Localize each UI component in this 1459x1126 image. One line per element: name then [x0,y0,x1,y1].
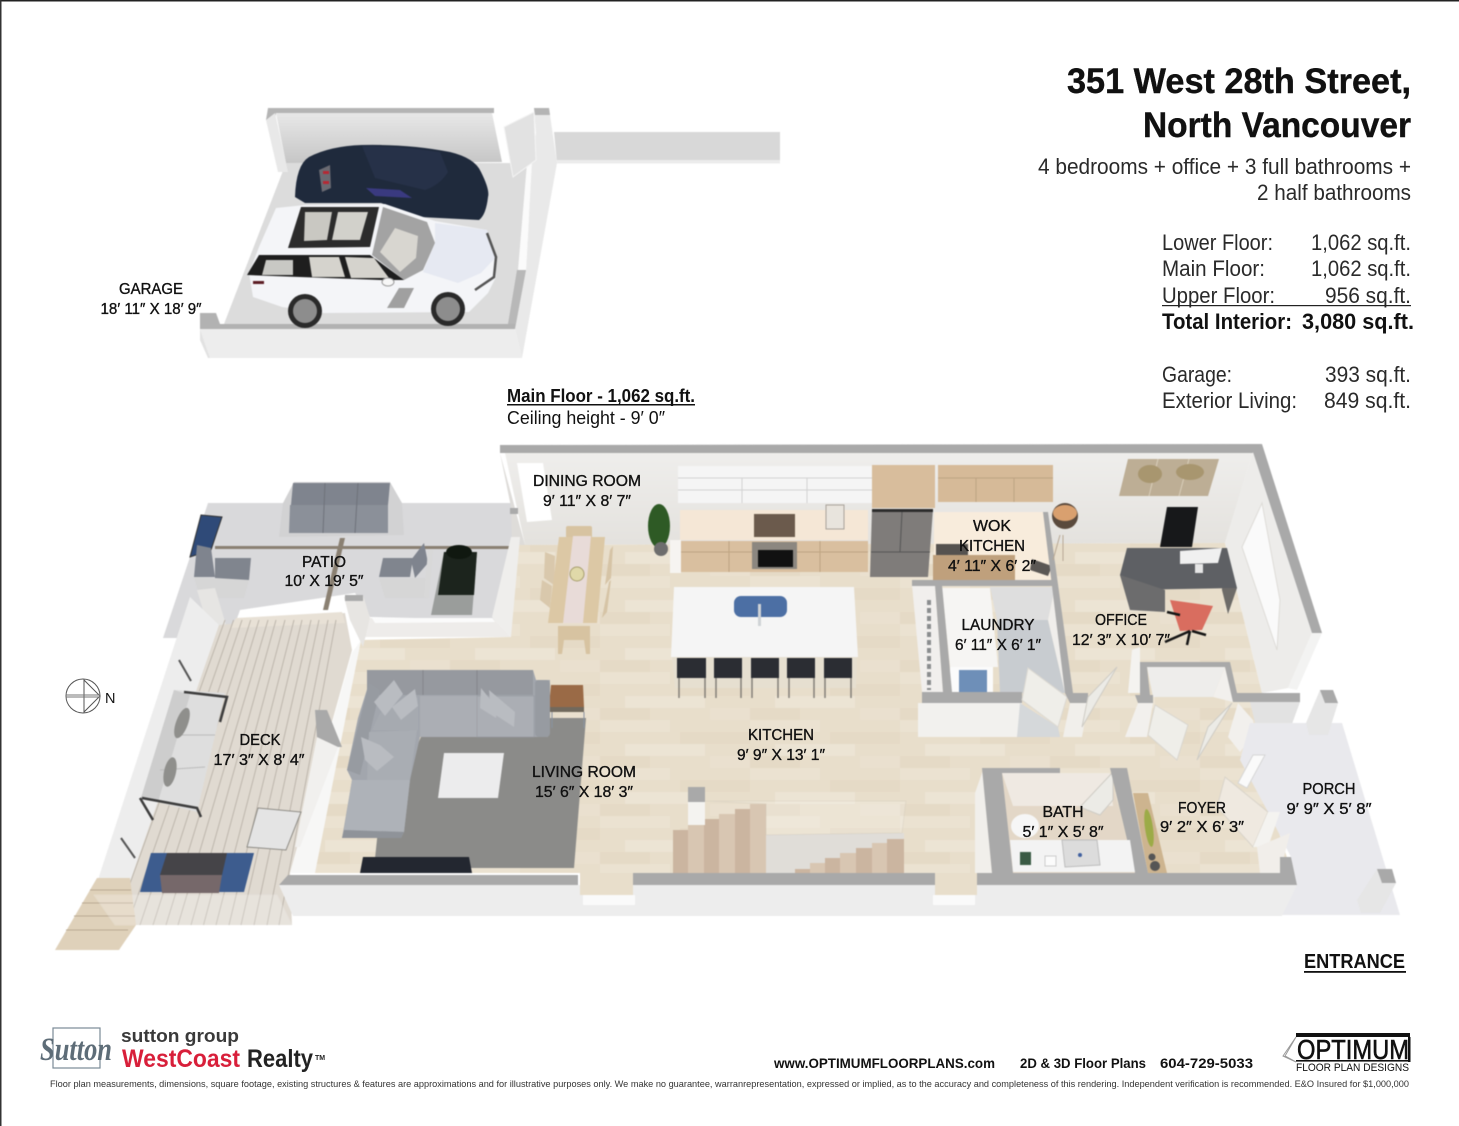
vanity [1010,840,1135,872]
foyer runner [1133,793,1167,873]
contact line [773,1055,1253,1071]
room labels: KITCHEN [748,727,814,744]
title: North Vancouver [1143,106,1411,145]
tall cabinet and fridge [870,465,935,577]
left living wall [290,640,361,873]
logo: Sutton group WestCoast Realty [40,1025,325,1073]
side table [549,685,584,728]
floor heading [507,386,695,428]
area table: 1,062 sq.ft. [1311,230,1411,255]
area table: Exterior Living: [1162,388,1297,413]
contact line: www.OPTIMUMFLOORPLANS.com [773,1055,995,1071]
room labels: WOK [973,518,1011,535]
hood [423,223,496,283]
room labels: DECK [240,732,281,749]
property summary: 4 bedrooms + office + 3 full bathrooms + [1038,154,1411,179]
bathroom [975,768,1148,873]
room labels: 9′ 2″ X 6′ 3″ [1160,819,1244,836]
garage plan [200,108,780,358]
logo: Sutton group WestCoast Realty: TM [315,1055,325,1062]
deck sofa [140,690,227,820]
logo: Optimum Floor Plan Designs: OPTIMUM [1297,1034,1409,1065]
red chair [1165,600,1213,645]
room labels: FOYER [1178,800,1226,817]
deck chair [247,808,301,850]
dark sports car [295,145,488,220]
white SUV [247,204,496,328]
stairs [673,787,906,873]
garage floor [224,163,536,324]
green leaf decor [1142,809,1156,847]
area table: 956 sq.ft. [1325,283,1411,308]
front wall [279,857,1297,916]
closet block [1125,647,1300,760]
room labels: DINING ROOM [533,473,641,490]
bar stools [677,658,852,678]
room labels: LAUNDRY [962,617,1035,634]
glass railing [93,597,219,905]
area table: Upper Floor: [1162,283,1275,308]
laundry door [1022,668,1067,727]
garage walkway [554,132,780,164]
room labels: 15′ 6″ X 18′ 3″ [535,784,633,801]
room labels [214,473,1372,841]
garage right wall [508,108,557,358]
area table: Lower Floor: [1162,230,1273,255]
area table: Total Interior: [1162,309,1292,334]
lower flight [673,804,766,873]
rail post [688,787,705,825]
room labels: 9′ 11″ X 8′ 7″ [543,493,631,510]
floor heading: Main Floor - 1,062 sq.ft. [507,386,695,406]
office door [1082,667,1117,727]
compass [66,679,115,713]
logo: Optimum Floor Plan Designs [1283,1033,1410,1074]
floor lamp [1052,503,1078,561]
foyer [1133,755,1290,873]
room labels: 9′ 9″ X 13′ 1″ [737,747,825,764]
gravel strips [215,538,511,610]
room labels: 9′ 9″ X 5′ 8″ [1286,801,1372,818]
black office chair [1160,507,1198,547]
Sutton emblem: Sutton [40,1032,112,1068]
dining window [517,463,552,522]
logo: Sutton group WestCoast Realty: sutton group [121,1025,239,1046]
patio parapet wall [344,508,520,647]
contact line: 2D & 3D Floor Plans [1020,1055,1146,1071]
compass: N [105,691,115,707]
kitchen cabinets [670,466,872,573]
area table: Garage: [1162,362,1232,387]
room labels: 5′ 1″ X 5′ 8″ [1022,824,1104,841]
potted plant [648,504,670,556]
laundry [912,512,1117,737]
desk [1120,548,1237,614]
blue storage box [190,515,222,557]
planter [431,545,477,615]
upper flight [795,839,904,873]
garage label: 18′ 11″ X 18′ 9″ [100,301,202,318]
contact line: 604-729-5033 [1160,1055,1253,1071]
office [1052,444,1322,693]
back wall [500,444,1262,545]
right patio chair [379,543,433,598]
logo: Sutton group WestCoast Realty: Realty [247,1045,313,1073]
room labels: LIVING ROOM [532,764,636,781]
windshield [372,207,435,280]
cooktop [754,514,795,537]
area table: 393 sq.ft. [1325,362,1411,387]
room labels: 4′ 11″ X 6′ 2″ [948,558,1036,575]
side windows [247,255,404,280]
room labels: 17′ 3″ X 8′ 4″ [214,752,305,769]
room labels: PORCH [1302,781,1356,798]
area table: 849 sq.ft. [1324,388,1411,413]
right wall [1225,444,1322,693]
wood floor [313,543,1292,873]
throw pillows [361,680,515,771]
patio door pillar [197,588,229,637]
room labels: PATIO [302,554,346,571]
oven [752,542,797,569]
entrance label: ENTRANCE [1304,951,1405,973]
garage label: GARAGE [119,281,183,298]
title: 351 West 28th Street, [1067,62,1411,101]
area table [1162,230,1414,413]
left patio chair [194,545,251,598]
patio sofa [279,482,404,537]
fireplace [360,857,472,873]
room labels: 12′ 3″ X 10′ 7″ [1072,632,1170,649]
wok kitchen [933,465,1055,580]
title [1067,62,1411,145]
main floor plan [55,444,1400,950]
floor heading: Ceiling height - 9′ 0″ [507,407,665,428]
world map art [1119,459,1219,496]
logo: Sutton group WestCoast Realty: WestCoast [122,1045,241,1073]
room labels: OFFICE [1095,612,1147,629]
patio [163,482,512,638]
room labels: 10′ X 19′ 5″ [284,573,364,590]
area table: 1,062 sq.ft. [1311,256,1411,281]
garage back wall [266,108,502,172]
room labels: BATH [1042,804,1084,821]
room labels: 6′ 11″ X 6′ 1″ [955,637,1041,654]
garage label [100,281,202,318]
deck stairs [55,878,136,950]
toilet [1011,814,1039,838]
porch [1240,690,1400,915]
porch pillars [1306,690,1338,735]
front glass panel [94,895,292,925]
deck [55,597,352,950]
garage front wall [200,313,522,358]
garage door [504,112,536,177]
dining set [540,526,613,654]
living room [342,670,586,873]
closet doors [1148,705,1188,760]
rug [374,718,586,868]
glass rail [705,801,906,835]
property summary [1038,154,1411,205]
coffee machine [826,505,844,529]
grill and blue table [140,853,254,893]
island [671,587,858,698]
sectional sofa [342,670,550,838]
room labels: KITCHEN [959,538,1025,555]
area table: 3,080 sq.ft. [1302,309,1414,334]
coffee table [438,753,504,798]
area table: Main Floor: [1162,256,1265,281]
logo: Optimum Floor Plan Designs: FLOOR PLAN DESIGNS [1296,1062,1409,1074]
property summary: 2 half bathrooms [1257,180,1411,205]
disclaimer: Floor plan measurements, dimensions, square footage, existing structures & features are approximations and for illustrative purposes only. We make no guarantee, warranrepresentation, expressed or implied, as to the accuracy and completeness of this rendering. Independent verification is recommended. E&O Insured for $1,000,000 [50,1079,1409,1089]
